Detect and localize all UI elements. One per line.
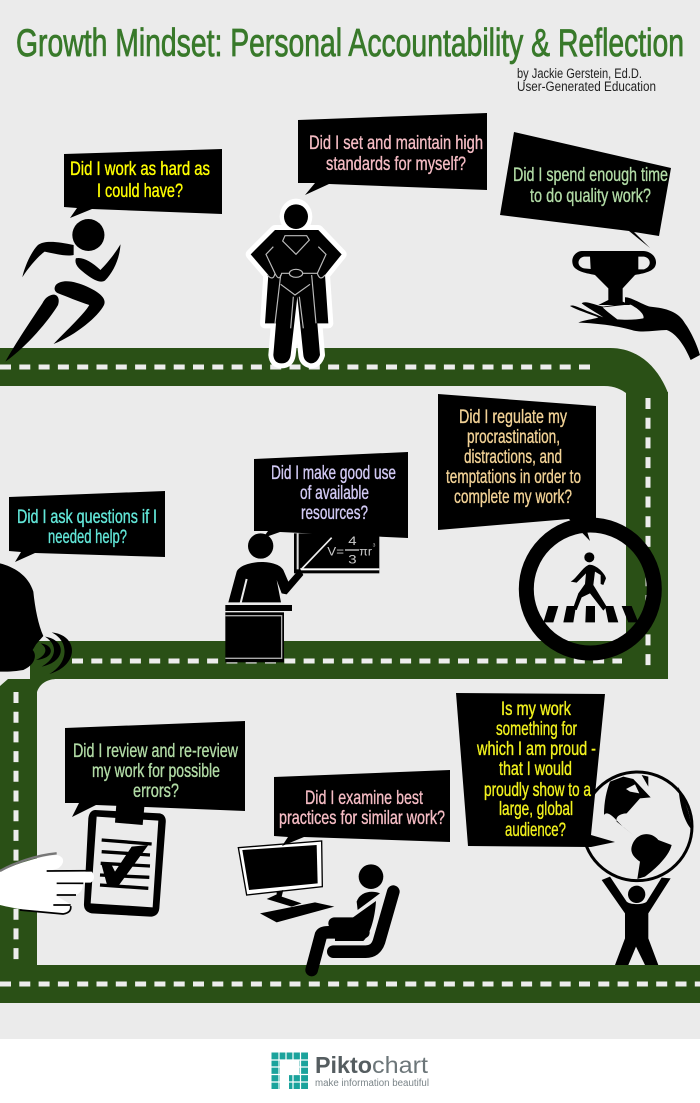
speech bubble: work hard: Did I work as hard as bbox=[70, 159, 210, 180]
speech bubble: available resources: resources? bbox=[301, 503, 368, 524]
speech bubble: high standards bbox=[298, 113, 487, 195]
speech bubble: high standards: standards for myself? bbox=[326, 154, 466, 175]
speech bubble: best practices: Did I examine best bbox=[305, 788, 424, 809]
icon: figure holding globe bbox=[583, 772, 692, 965]
speech bubble: high standards: Did I set and maintain high bbox=[309, 133, 483, 154]
speech bubble: global audience: something for bbox=[496, 719, 577, 740]
byline: User-Generated Education bbox=[517, 79, 656, 94]
icon: superhero bbox=[251, 199, 342, 363]
chalkboard with formula: 4 bbox=[348, 534, 357, 548]
speech bubble: enough time bbox=[500, 132, 671, 248]
speech bubble: best practices: practices for similar work? bbox=[279, 808, 445, 829]
chalkboard with formula: πr bbox=[359, 545, 372, 559]
speech bubble: available resources: of available bbox=[300, 483, 369, 504]
speech bubble: global audience: Is my work bbox=[501, 699, 571, 720]
chalkboard with formula bbox=[294, 533, 379, 573]
chalkboard with formula: 3 bbox=[348, 552, 357, 566]
speech bubble: work hard: I could have? bbox=[97, 181, 183, 202]
speech bubble: review work: Did I review and re-review bbox=[73, 741, 238, 762]
footer panel bbox=[0, 1039, 700, 1103]
icon: computer user bbox=[238, 841, 393, 970]
Piktochart logo bbox=[271, 1052, 429, 1089]
speech bubble: review work bbox=[65, 721, 245, 817]
speech bubble: procrastination: procrastination, bbox=[467, 427, 560, 448]
speech bubble: global audience: which I am proud - bbox=[476, 739, 596, 760]
speech bubble: work hard bbox=[64, 149, 222, 218]
Piktochart logo: chart bbox=[372, 1052, 429, 1078]
speech bubble: global audience: proudly show to a bbox=[484, 780, 591, 801]
Piktochart logo: Pikto bbox=[315, 1052, 372, 1078]
speech bubble: procrastination: temptations in order to bbox=[446, 467, 581, 488]
speech bubble: procrastination: Did I regulate my bbox=[459, 407, 567, 428]
speech bubble: procrastination: distractions, and bbox=[464, 447, 562, 468]
speech bubble: global audience: that I would bbox=[499, 759, 572, 780]
speech bubble: ask questions: Did I ask questions if I bbox=[17, 507, 157, 528]
speech bubble: review work: my work for possible bbox=[92, 761, 220, 782]
speech bubble: procrastination: complete my work? bbox=[454, 487, 572, 508]
icon: clipboard with checkmark bbox=[84, 800, 166, 917]
speech bubble: best practices bbox=[274, 770, 450, 846]
speech bubble: ask questions: needed help? bbox=[48, 527, 127, 548]
speech bubble: global audience: large, global bbox=[499, 799, 573, 820]
icon: speaking head bbox=[0, 563, 72, 674]
chalkboard with formula: V= bbox=[327, 545, 344, 559]
icon: trophy on hand bbox=[570, 251, 700, 360]
speech bubble: available resources bbox=[254, 452, 408, 538]
icon: pointing hand bbox=[0, 853, 94, 914]
speech bubble: global audience bbox=[456, 693, 615, 847]
icon: runner bbox=[5, 219, 121, 362]
byline: by Jackie Gerstein, Ed.D. bbox=[517, 66, 642, 81]
speech bubble: review work: errors? bbox=[133, 781, 179, 802]
icon: teacher at lectern bbox=[225, 533, 379, 662]
speech bubble: ask questions bbox=[9, 491, 165, 562]
speech bubble: global audience: audience? bbox=[505, 820, 566, 841]
speech bubble: available resources: Did I make good use bbox=[271, 463, 396, 484]
Piktochart logo: make information beautiful bbox=[315, 1078, 429, 1089]
chalkboard with formula: 3 bbox=[373, 542, 376, 548]
byline bbox=[517, 66, 656, 94]
logo mark bbox=[271, 1052, 308, 1089]
winding green road bbox=[0, 348, 700, 1003]
speech bubble: enough time: to do quality work? bbox=[530, 186, 651, 207]
icon: pedestrian crossing sign bbox=[526, 525, 654, 653]
speech bubble: procrastination bbox=[438, 394, 596, 541]
